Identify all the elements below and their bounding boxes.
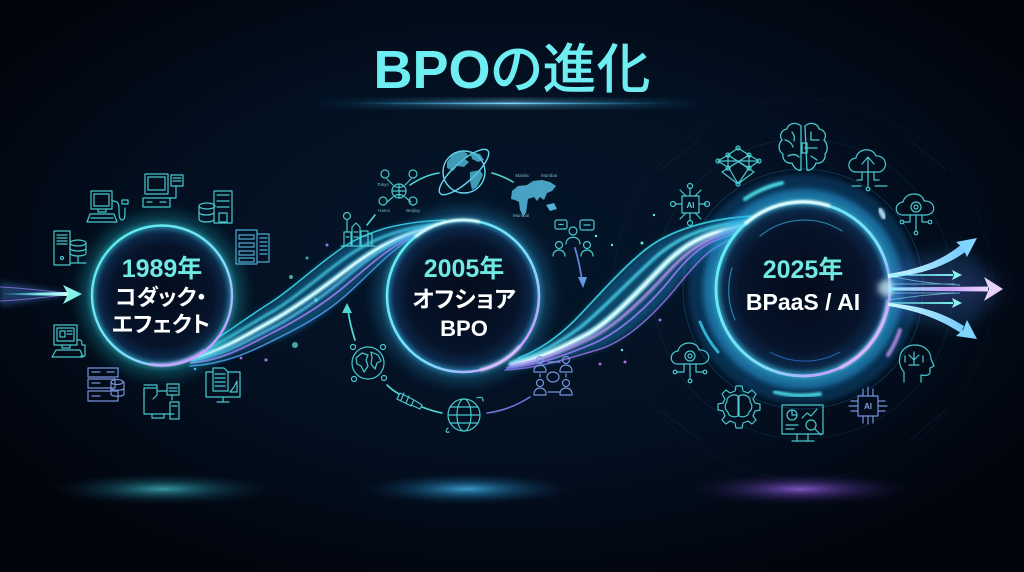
- year: 1989: 1989年: [122, 255, 202, 283]
- input arrow: [0, 282, 82, 306]
- label: コダック・エフェクト: エフェクト: [112, 312, 210, 337]
- icon: stacked servers with database: [88, 368, 124, 401]
- icon: database and tower: [199, 191, 232, 223]
- label: コダック・エフェクト: [112, 285, 210, 337]
- particles: [194, 214, 661, 370]
- icon: AI chip: AI: [686, 201, 694, 210]
- icon: brain in gear: [718, 386, 760, 428]
- icon: desktop and terminal: [144, 384, 179, 419]
- icon: neural network: [716, 146, 761, 186]
- label: オフショアBPO: オフショア: [412, 286, 516, 312]
- icons: 1989 legacy computing: [52, 174, 269, 419]
- arrow: small upper: [890, 270, 962, 280]
- icon: cloud with gear: [896, 194, 934, 235]
- arrow: to 2005 ribbon: [575, 248, 587, 288]
- icon: cable connector: [397, 393, 422, 409]
- HUD rings behind 2025 circle: [613, 99, 993, 479]
- icon: cloud with gear lower: [671, 343, 709, 383]
- icon: AI chip: [670, 184, 710, 226]
- icon: world map: Manila: [515, 173, 529, 178]
- icon: server and database: [54, 231, 86, 265]
- icon: server rack: [236, 230, 269, 264]
- icon: monitor with report: [206, 368, 240, 402]
- arrow: main purple: [890, 277, 1003, 301]
- icon: globe with people: [350, 344, 386, 382]
- icon: cloud upload: [849, 150, 887, 191]
- icons: 2005 global offshore: [341, 143, 594, 432]
- title underline glow: [310, 100, 710, 107]
- icon: world map: Mumbai: [513, 213, 529, 218]
- icon: head with mind: [899, 345, 934, 382]
- output arrows: [878, 238, 1003, 339]
- arrow: up right: [888, 238, 977, 278]
- arrow: small lower: [890, 298, 962, 308]
- icon: earth with orbit: [434, 143, 494, 201]
- icon: AI processor: [849, 387, 887, 424]
- circle: 2025: [700, 183, 900, 395]
- icon: team network: [534, 356, 572, 395]
- icon: wireframe globe: [446, 397, 483, 432]
- floor glow: 2025: [688, 473, 912, 505]
- title: BPOの進化: [373, 40, 651, 100]
- orbit arcs: [367, 173, 530, 413]
- icon: analytics monitor: [782, 405, 823, 441]
- year: 2005: 2005年: [424, 255, 504, 283]
- icon: city skyline: [341, 212, 375, 246]
- year: 2025: 2025年: [763, 256, 843, 284]
- icon: network globe Tokyo: Hanoi: [378, 208, 390, 213]
- arrow: down right: [888, 303, 977, 339]
- icon: network globe Tokyo: Tokyo: [377, 182, 389, 187]
- label: オフショアBPO: [412, 286, 516, 341]
- icons: 2025 AI: [670, 123, 934, 441]
- arrow: up the loop: [342, 303, 355, 340]
- icon: network globe Tokyo: Beijing: [406, 208, 420, 213]
- icon: people with chat: [553, 220, 594, 256]
- icon: computer with printer: [143, 174, 183, 207]
- floor glow: 1989: [51, 473, 275, 505]
- icon: AI processor: AI: [864, 402, 872, 411]
- icon: world map: [511, 173, 557, 218]
- floor glow: 2005: [362, 473, 572, 505]
- circle: 1989: [87, 220, 237, 370]
- icon: computer with documents: [52, 325, 85, 357]
- icon: computer with plug: [87, 191, 128, 222]
- label: オフショアBPO: BPO: [440, 316, 488, 341]
- icon: brain with circuit: [779, 123, 827, 170]
- circle: 2005: [382, 215, 544, 377]
- flow ribbon: 2005 to 2025: [505, 216, 755, 370]
- label: コダック・エフェクト: コダック・: [115, 285, 207, 310]
- icon: world map: Mumbai: [541, 173, 557, 178]
- flow ribbon: 1989 to 2005: [190, 220, 445, 366]
- icon: network globe Tokyo: [377, 170, 420, 213]
- label: BPaaS / AI: BPaaS / AI: [746, 289, 860, 315]
